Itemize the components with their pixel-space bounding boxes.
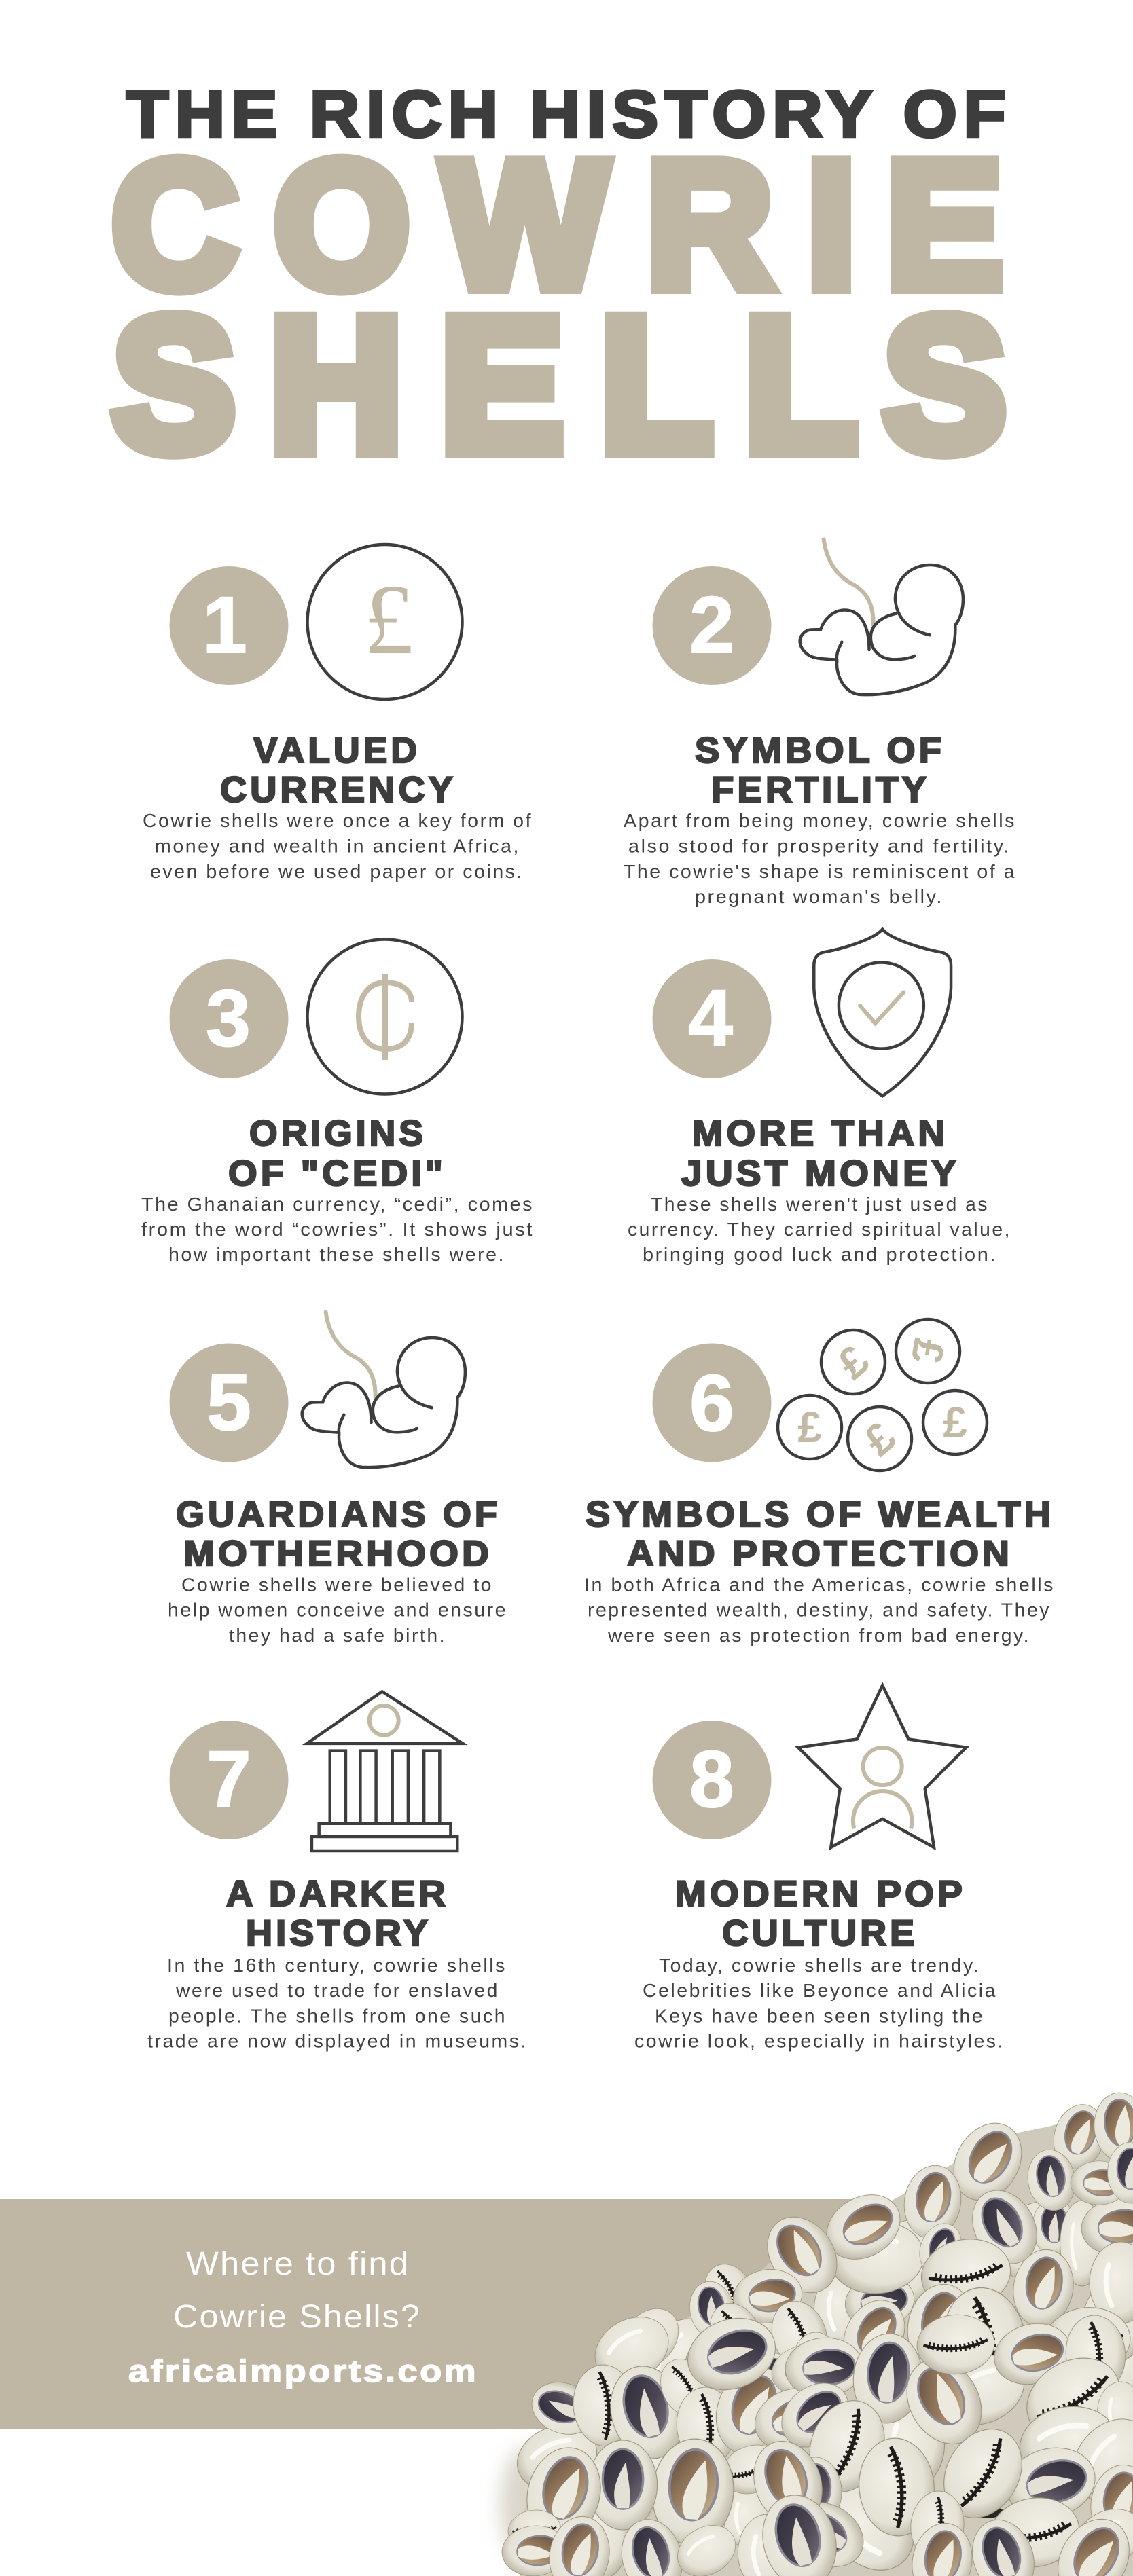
body text [624, 810, 1016, 907]
body text: also stood for prosperity and fertility. [628, 835, 1011, 857]
body text: cowrie look, especially in hairstyles. [634, 2030, 1005, 2052]
body text: These shells weren't just used as [651, 1194, 989, 1215]
panel: 1 valued currency [143, 545, 533, 882]
body text [147, 1955, 528, 2052]
heading [695, 731, 945, 810]
heading: VALUED [253, 731, 420, 771]
icon: museum building [307, 1691, 463, 1851]
panel: 3 origins of cedi [141, 940, 534, 1265]
heading: ORIGINS [249, 1114, 427, 1154]
number badge 3 [170, 959, 288, 1078]
panel: 5 guardians of motherhood [168, 1312, 507, 1646]
heading: CURRENCY [220, 770, 456, 810]
number badge 5 [170, 1343, 288, 1462]
number badge 8: 8 [689, 1735, 734, 1824]
body text: were seen as protection from bad energy. [607, 1625, 1030, 1646]
number badge 4: 4 [688, 974, 733, 1063]
heading: CULTURE [722, 1913, 918, 1953]
banner text [128, 2246, 478, 2389]
number badge 5: 5 [206, 1358, 251, 1448]
body text: trade are now displayed in museums. [147, 2030, 528, 2052]
heading [586, 1494, 1054, 1574]
heading: MODERN POP [675, 1874, 966, 1914]
heading: A DARKER [226, 1874, 449, 1914]
icon: five pound coins: £ [855, 1412, 905, 1465]
number badge 1: 1 [202, 581, 247, 670]
icon: fetus [800, 539, 963, 695]
panel: 8 modern pop culture [634, 1685, 1005, 2052]
body text: Keys have been seen styling the [655, 2006, 984, 2026]
body text: Today, cowrie shells are trendy. [659, 1955, 980, 1976]
body text: The Ghanaian currency, “cedi”, comes [141, 1194, 534, 1215]
heading: AND PROTECTION [627, 1534, 1013, 1574]
panel: 6 symbols of wealth and protection [584, 1319, 1055, 1646]
number badge 7 [170, 1721, 288, 1839]
banner text: Where to find [186, 2246, 410, 2282]
photo: pile of cowrie shells [500, 2091, 1133, 2576]
title line: the rich history of: THE RICH HISTORY OF [126, 78, 1012, 151]
number badge 6: 6 [689, 1359, 734, 1448]
title word: cowrie: COWRIE [112, 125, 1002, 325]
heading: SYMBOL OF [695, 731, 945, 771]
number badge 2 [652, 566, 772, 685]
body text: Celebrities like Beyonce and Alicia [643, 1980, 997, 2001]
heading: FERTILITY [711, 770, 930, 810]
panel: 4 more than just money [628, 930, 1011, 1265]
number badge 4 [652, 959, 772, 1078]
icon: five pound coins: £ [797, 1403, 822, 1452]
number badge 8 [652, 1721, 772, 1839]
body text: pregnant woman's belly. [695, 886, 943, 907]
heading: GUARDIANS OF [176, 1494, 501, 1534]
body text: from the word “cowries”. It shows just [141, 1219, 534, 1240]
body text: how important these shells were. [168, 1244, 505, 1265]
icon: star with person [798, 1685, 966, 1847]
body text: even before we used paper or coins. [150, 861, 524, 882]
icon: five pound coins [778, 1319, 987, 1471]
call to action banner [0, 2199, 856, 2429]
body text [584, 1574, 1055, 1646]
heading: SYMBOLS OF WEALTH [586, 1494, 1054, 1534]
body text: help women conceive and ensure [168, 1600, 507, 1620]
icon: five pound coins: £ [828, 1336, 878, 1388]
title [112, 78, 1012, 490]
heading [675, 1874, 966, 1953]
body text: Cowrie shells were believed to [181, 1574, 493, 1596]
heading [226, 1874, 449, 1953]
body text: The cowrie's shape is reminiscent of a [624, 861, 1016, 882]
icon: cedi coin [307, 940, 462, 1094]
body text: Cowrie shells were once a key form of [143, 810, 533, 831]
banner text: Cowrie Shells? [173, 2299, 421, 2335]
icon: five pound coins: £ [943, 1398, 967, 1447]
body text [628, 1194, 1011, 1265]
body text [143, 810, 533, 882]
body text: Apart from being money, cowrie shells [624, 810, 1016, 831]
number badge 7: 7 [206, 1735, 251, 1824]
icon: shield with check [814, 930, 951, 1096]
body text: currency. They carried spiritual value, [628, 1219, 1011, 1240]
icon: five pound coins: £ [901, 1335, 954, 1367]
number badge 6 [652, 1343, 772, 1462]
banner text: africaimports.com [128, 2353, 478, 2389]
body text: money and wealth in ancient Africa, [155, 835, 520, 857]
body text: In both Africa and the Americas, cowrie shells [584, 1574, 1055, 1596]
panel: 2 symbol of fertility [624, 539, 1016, 907]
body text: bringing good luck and protection. [643, 1244, 997, 1265]
heading: HISTORY [246, 1913, 431, 1953]
body text: were used to trade for enslaved [175, 1980, 499, 2001]
number badge 1 [170, 566, 288, 685]
body text [168, 1574, 507, 1646]
heading [228, 1114, 446, 1194]
icon: pound coin [307, 545, 462, 699]
body text [634, 1955, 1005, 2052]
number badge 3: 3 [206, 974, 251, 1063]
body text: In the 16th century, cowrie shells [167, 1955, 507, 1976]
icon: fetus [302, 1312, 465, 1467]
heading: MOTHERHOOD [183, 1534, 492, 1574]
heading: JUST MONEY [681, 1154, 960, 1194]
body text: people. The shells from one such [168, 2006, 507, 2026]
heading: OF "CEDI" [228, 1154, 446, 1194]
body text: they had a safe birth. [229, 1625, 446, 1646]
body text [141, 1194, 534, 1265]
title word: shells: SHELLS [113, 279, 1006, 490]
heading [220, 731, 456, 810]
heading [681, 1114, 960, 1194]
heading: MORE THAN [692, 1114, 948, 1154]
number badge 2: 2 [689, 581, 734, 670]
panel: 7 a darker history [147, 1691, 528, 2052]
heading [176, 1494, 501, 1574]
icon: pound coin: £ [363, 564, 414, 676]
body text: represented wealth, destiny, and safety. They [588, 1600, 1051, 1620]
